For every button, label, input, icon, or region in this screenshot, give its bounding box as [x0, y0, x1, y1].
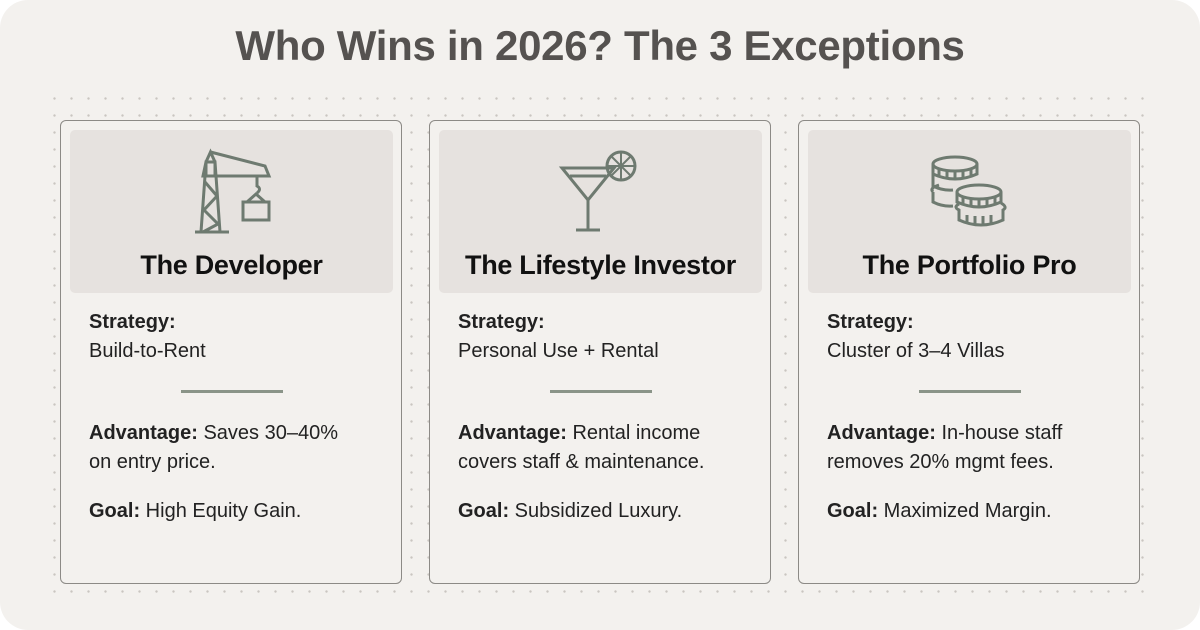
- text: strategy: [827, 311, 1004, 362]
- icon: crane: [195, 148, 272, 234]
- text: advantage: covers staff & maintenance.: [458, 451, 704, 473]
- text: strategy: [89, 311, 206, 362]
- text: strategy: Personal Use + Rental: [458, 340, 659, 362]
- text: advantage: Advantage: Saves 30–40%: [89, 422, 338, 444]
- text: strategy: Strategy:: [89, 311, 176, 333]
- text: advantage: Advantage: In-house staff: [827, 422, 1062, 444]
- text: goal: Goal: Subsidized Luxury.: [458, 500, 682, 522]
- header: portfolio: [808, 130, 1131, 293]
- text: advantage: on entry price.: [89, 451, 216, 473]
- text: advantage: Advantage: Rental income: [458, 422, 700, 444]
- header: developer: [70, 130, 393, 293]
- header: lifestyle: The Lifestyle Investor: [465, 250, 736, 280]
- panel: portfolio pro: [798, 120, 1140, 584]
- panel: lifestyle investor: [429, 120, 771, 584]
- text: advantage: [89, 422, 338, 473]
- header: portfolio: The Portfolio Pro: [863, 250, 1076, 280]
- header: developer: The Developer: [140, 250, 323, 280]
- title: Who Wins in 2026? The 3 Exceptions: [235, 22, 965, 69]
- text: advantage: [827, 422, 1062, 473]
- text: strategy: Build-to-Rent: [89, 340, 206, 362]
- text: goal: Goal: High Equity Gain.: [89, 500, 301, 522]
- panel: developer: [60, 120, 402, 584]
- icon: cocktail: [559, 150, 636, 232]
- text: advantage: [458, 422, 704, 473]
- text: strategy: Strategy:: [827, 311, 914, 333]
- text: goal: Goal: Maximized Margin.: [827, 500, 1052, 522]
- text: strategy: [458, 311, 659, 362]
- text: advantage: removes 20% mgmt fees.: [827, 451, 1054, 473]
- icon: coins: [930, 156, 1007, 226]
- text: strategy: Strategy:: [458, 311, 545, 333]
- header: lifestyle: [439, 130, 762, 293]
- text: strategy: Cluster of 3–4 Villas: [827, 340, 1004, 362]
